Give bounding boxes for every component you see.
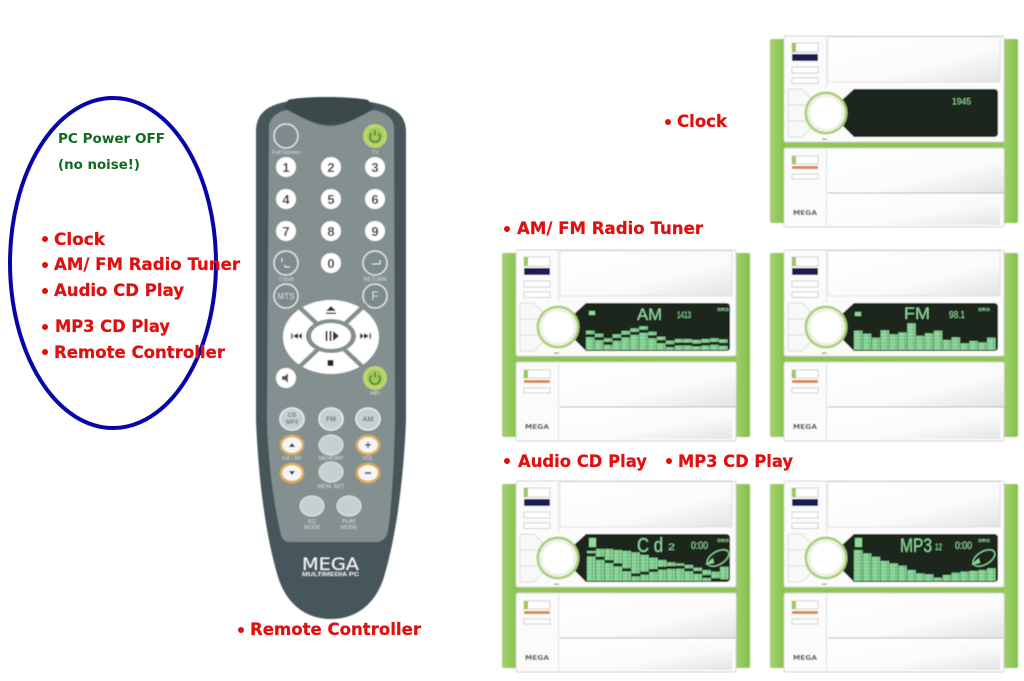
MEGA logo: MULTIMEDIA PC [302,572,359,578]
source buttons: AM [363,416,374,424]
volume buttons [357,436,379,482]
unit: AM radio display: 1413 [677,310,691,320]
unit: audio CD display: SRS [717,538,729,543]
unit: audio CD display [502,481,750,672]
unit: FM radio display: SRS [978,307,990,312]
unit: audio CD display: 2 [668,542,675,552]
button: Full Screen [272,124,300,156]
unit: MP3 CD display: SRS [978,538,990,543]
remote controller [256,97,406,619]
button: EQ mode: MODE [304,525,321,531]
button: HiFi power: HiFi [370,391,380,397]
label: Clock: Clock [677,112,728,132]
unit: AM radio display: AM [637,305,662,324]
memory buttons [318,435,345,490]
source buttons [280,408,380,430]
memory buttons: MEM. SET [318,484,345,490]
unit: clock display: MEGA [793,209,818,217]
feature: Remote Controller: Remote Controller [54,343,226,363]
heading: PC Power OFF: PC Power OFF [58,132,165,147]
feature: Clock: Clock [54,230,106,250]
number buttons: 9 [371,224,379,239]
button: T.Shift [274,251,298,283]
feature: MP3 CD Play: MP3 CD Play [55,317,170,337]
button: EQ mode: EQ [308,519,317,525]
button: T.Shift: T.Shift [278,277,294,283]
navigation pad [283,300,379,374]
number buttons: 3 [371,160,379,175]
unit: MP3 CD display: MEGA [793,654,818,662]
oval panel: PC power off features [10,98,241,428]
unit: MP3 CD display: MP3 [900,536,932,557]
button: EQ mode [300,496,324,531]
button: mute [276,368,296,388]
label: Remote Controller: Remote Controller [250,620,422,640]
button: Return [363,251,387,283]
volume buttons: VOL [362,456,374,462]
source buttons: CD [288,413,297,419]
unit: AM radio display: MEGA [525,423,550,431]
unit: MP3 CD display: 12 [935,542,942,552]
remote body [256,97,406,619]
memory buttons: MEMORY [319,456,344,462]
button: TV power [363,124,387,156]
unit: audio CD display: C d [637,535,663,557]
number buttons: 7 [282,224,290,239]
MEGA logo: MEGA [302,555,359,575]
number buttons [276,157,385,273]
source buttons: FM [326,416,336,424]
button: Play mode [337,496,361,531]
remote face panel [267,110,395,542]
feature: Audio CD Play: Audio CD Play [54,281,184,301]
label: AM/FM Radio Tuner: AM/ FM Radio Tuner [517,219,704,239]
unit: audio CD display: MEGA [525,654,550,662]
unit: MP3 CD display: 0:00 [955,540,972,552]
unit: AM radio display [502,250,750,441]
label: Audio CD Play: Audio CD Play [518,452,647,472]
feature: AM/FM Radio Tuner: AM/ FM Radio Tuner [54,255,241,275]
unit: FM radio display [770,250,1018,441]
number buttons: 0 [327,256,335,271]
button: Play mode: PLAY [342,519,356,525]
unit: MP3 CD display [770,481,1018,672]
number buttons: 8 [327,224,335,239]
channel buttons [281,436,303,482]
button: Play mode: MODE [341,525,358,531]
number buttons: 2 [327,160,335,175]
button: F [363,284,387,308]
button: MTS: MTS [278,292,294,301]
label: MP3 CD Play: MP3 CD Play [678,452,793,472]
unit: AM radio display: SRS [717,307,729,312]
button: Return: RETURN [364,277,386,283]
oval outline [10,98,216,428]
unit: FM radio display: 98.1 [949,310,965,321]
subheading: no noise: (no noise!) [58,158,140,173]
unit: audio CD display: 0:00 [691,540,708,552]
number buttons: 4 [282,192,290,207]
unit: FM radio display: MEGA [793,423,818,431]
number buttons: 6 [371,192,379,207]
button: TV power: TV [371,150,379,156]
unit: clock display: 1945 [952,96,971,108]
button: MTS [274,284,298,308]
channel buttons: CH / RF [282,456,303,462]
unit: clock display [770,36,1018,227]
button: Full Screen: Full Screen [272,150,300,156]
button: F: F [371,289,379,303]
number buttons: 5 [327,192,335,207]
number buttons: 1 [282,160,290,175]
unit: FM radio display: FM [904,304,930,323]
button: HiFi power [363,366,387,397]
source buttons: MP3 [286,420,299,426]
